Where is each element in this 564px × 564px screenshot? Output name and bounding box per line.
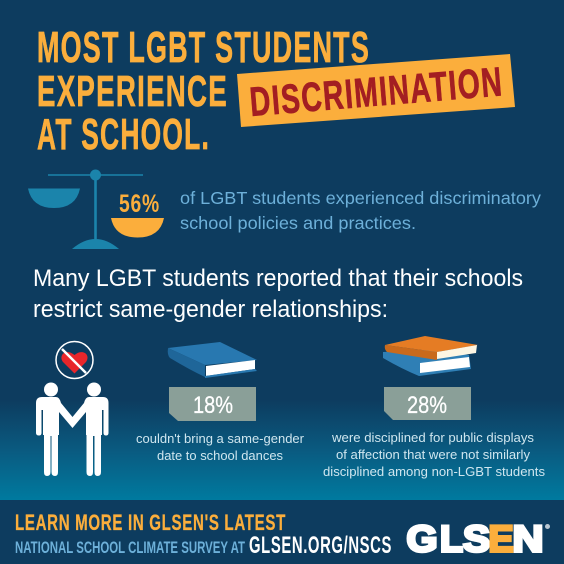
footer text [15, 510, 392, 559]
text: school dances [136, 431, 305, 463]
label: 18%: 18% [193, 392, 233, 419]
icon: single blue book [168, 342, 257, 378]
title [37, 23, 370, 159]
text: disciplined [323, 430, 546, 479]
icon: balance scale [28, 170, 164, 249]
stat: 56%: 56% [119, 190, 160, 218]
logo: GLSEN: E [488, 518, 514, 560]
logo: GLSEN: S [463, 518, 490, 560]
text: school dances: couldn't bring a same-gender [136, 431, 305, 446]
subheading [33, 265, 523, 323]
logo: GLSEN [406, 518, 550, 560]
text: discriminatory policies: of LGBT students experienced discriminatory [180, 188, 541, 208]
subheading: Many LGBT students reported that their schools [33, 265, 523, 292]
footer text: GLSEN.ORG/NSCS [249, 532, 392, 559]
footer text: LEARN MORE IN GLSEN'S LATEST [15, 510, 286, 535]
footer bar [0, 500, 564, 564]
title: EXPERIENCE [37, 67, 228, 116]
text: school dances: date to school dances [157, 448, 283, 463]
text: disciplined: of affection that were not similarly [336, 447, 530, 462]
icon: no-heart symbol [56, 342, 93, 378]
label: 28%: 28% [407, 392, 447, 419]
logo: GLSEN: G [406, 518, 438, 560]
title: AT SCHOOL. [37, 110, 210, 159]
text: discriminatory policies: school policies and practices. [180, 213, 416, 233]
subheading: restrict same-gender relationships: [33, 296, 388, 323]
icon: stacked books [383, 336, 478, 376]
label: 28% [384, 387, 471, 420]
text: disciplined: disciplined among non-LGBT students [323, 464, 546, 479]
text: disciplined: were disciplined for public displays [331, 430, 534, 445]
footer text: NATIONAL SCHOOL CLIMATE SURVEY AT [15, 538, 245, 557]
text: discriminatory policies [180, 188, 541, 233]
logo: GLSEN: N [512, 518, 544, 560]
logo: GLSEN: L [440, 518, 463, 560]
label: 18% [169, 387, 256, 421]
icon: two people holding hands [36, 382, 108, 476]
